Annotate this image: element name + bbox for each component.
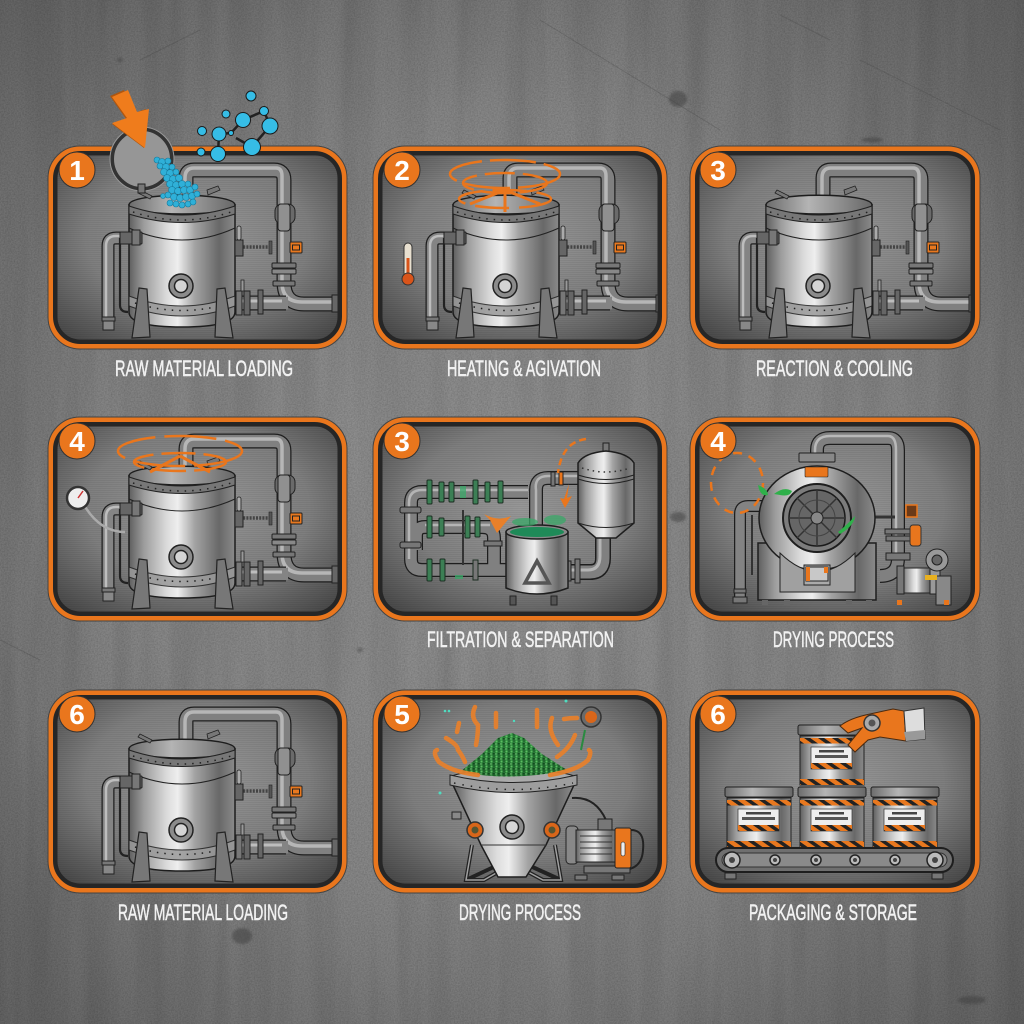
panel 5: filtration and separation — [373, 417, 667, 621]
step number badge 2 — [384, 152, 420, 188]
panel 1: raw material loading — [48, 90, 347, 349]
label 7: RAW MATERIAL LOADING — [118, 900, 288, 925]
label 5: FILTRATION & SEPARATION — [427, 627, 614, 652]
drum fan window — [783, 484, 851, 552]
orange heat swirls — [435, 707, 590, 775]
drum pipework — [740, 436, 898, 600]
icon: orange agitation swirls — [450, 160, 560, 212]
filtration pipework — [409, 476, 603, 572]
reactor vessel 4 — [102, 439, 342, 609]
label 6: DRYING PROCESS — [773, 627, 894, 652]
step number badge 4 — [700, 423, 736, 459]
step number badge 3: 3 — [710, 155, 726, 186]
panel 4: agitated reactor with gauge — [48, 417, 347, 621]
icon: pressure gauge — [67, 487, 125, 532]
drying drum body and base — [758, 453, 876, 605]
panel 7: raw material loading repeat — [48, 690, 347, 893]
floating particles — [438, 700, 568, 794]
cone dryer vessel — [450, 770, 577, 880]
small gauge with probe — [581, 707, 601, 750]
reactor vessel 3 — [739, 168, 979, 338]
reactor vessel 2 — [426, 168, 666, 338]
icon: molecule cluster — [197, 91, 278, 162]
step number badge 2: 2 — [394, 155, 410, 186]
orange robotic arm — [840, 708, 925, 752]
green filtrate wisps — [455, 486, 566, 579]
icon: open hatch — [110, 127, 174, 193]
green flanges — [427, 480, 503, 581]
step number badge 6: 6 — [69, 699, 85, 730]
step number badge 1: 1 — [69, 155, 85, 186]
step number badge 4: 4 — [69, 426, 85, 457]
pipe valves — [400, 472, 580, 583]
green granule heap — [460, 733, 567, 777]
reactor vessel 7 — [102, 712, 342, 882]
step number badge 5 — [384, 696, 420, 732]
label 8: DRYING PROCESS — [459, 900, 581, 925]
step number badge 6 — [700, 696, 736, 732]
pump motor with hose — [566, 798, 643, 880]
drums on conveyor — [725, 725, 939, 847]
icon: blue granules pouring — [154, 157, 200, 208]
green material flecks — [758, 485, 855, 534]
step number badge 4 — [59, 423, 95, 459]
panel 8: conical dryer — [373, 690, 667, 893]
step number badge 5: 5 — [394, 699, 410, 730]
panel 3: reaction and cooling — [690, 146, 980, 349]
step number badge 6: 6 — [710, 699, 726, 730]
step number badge 1 — [59, 152, 95, 188]
reactor vessel 1 — [102, 168, 342, 338]
label 2: HEATING & AGIVATION — [447, 356, 601, 381]
panel 6: drying drum — [690, 417, 980, 621]
motor pump — [897, 549, 951, 605]
icon: orange input arrow — [110, 90, 149, 148]
step number badge 3 — [384, 423, 420, 459]
panel 9: packaging and storage — [690, 690, 980, 893]
icon: thermometer — [402, 243, 414, 285]
receiver tank with green liquid — [506, 525, 568, 605]
step number badge 6 — [59, 696, 95, 732]
step number badge 3: 3 — [394, 426, 410, 457]
label 3: REACTION & COOLING — [756, 356, 913, 381]
conveyor belt — [716, 848, 953, 879]
pressure separator vessel — [578, 443, 634, 538]
panel 2: heating and agitation — [373, 146, 667, 349]
orange controls and tag — [906, 505, 921, 546]
step number badge 3 — [700, 152, 736, 188]
label 9: PACKAGING & STORAGE — [749, 900, 917, 925]
label 1: RAW MATERIAL LOADING — [115, 356, 293, 381]
orange dashed airflow ring — [711, 453, 763, 513]
icon: orange swirl — [118, 436, 242, 472]
orange flow marks — [484, 439, 586, 533]
step number badge 4: 4 — [710, 426, 726, 457]
